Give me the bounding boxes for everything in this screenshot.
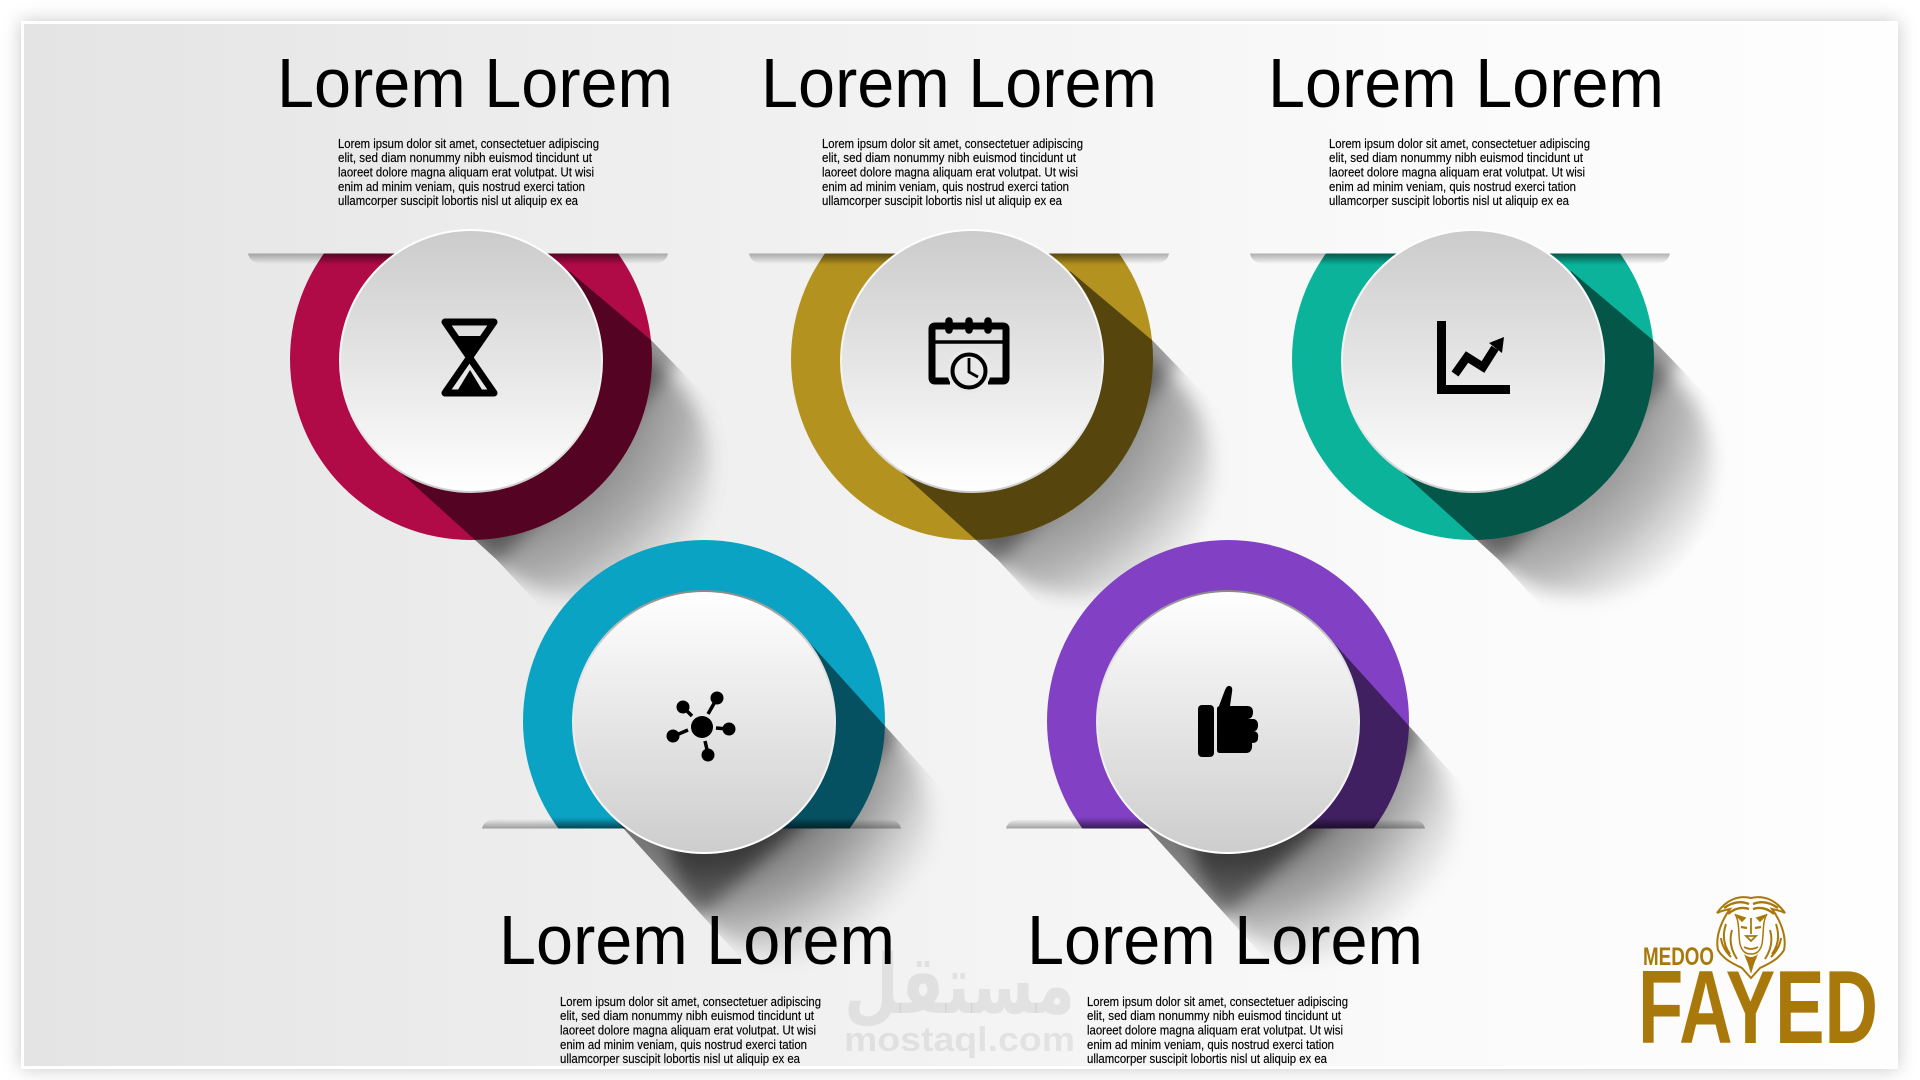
text block: ullamcorper suscipit lobortis nisl ut aliquip ex ea [1329, 194, 1569, 208]
text block: Lorem ipsum dolor sit amet, consectetuer adipiscing [1329, 137, 1590, 151]
badge: blue ring [482, 540, 931, 959]
text block: laoreet dolore magna aliquam erat volutpat. Ut wisi [1329, 166, 1585, 180]
icon: calendar with clock [932, 321, 1006, 393]
heading: Lorem Lorem [1268, 44, 1664, 122]
text block: Lorem ipsum dolor sit amet, consectetuer adipiscing [560, 995, 821, 1009]
watermark: mostaql.com [844, 1021, 1075, 1059]
badge: teal ring [1250, 231, 1718, 603]
text block: laoreet dolore magna aliquam erat volutpat. Ut wisi [560, 1024, 816, 1038]
icon: line chart with arrow [1437, 321, 1510, 394]
text block: ullamcorper suscipit lobortis nisl ut aliquip ex ea [822, 194, 1062, 208]
text block: laoreet dolore magna aliquam erat volutpat. Ut wisi [1087, 1024, 1343, 1038]
icon: lion head [1717, 897, 1785, 978]
badge: gold ring [749, 229, 1218, 603]
text block: elit, sed diam nonummy nibh euismod tincidunt ut [338, 151, 592, 165]
text block: enim ad minim veniam, quis nostrud exerci tation [1329, 180, 1576, 194]
text block: elit, sed diam nonummy nibh euismod tincidunt ut [1087, 1009, 1341, 1023]
text block: laoreet dolore magna aliquam erat volutpat. Ut wisi [822, 166, 1078, 180]
text block: enim ad minim veniam, quis nostrud exerci tation [338, 180, 585, 194]
text block [1087, 995, 1348, 1066]
panel: network [482, 540, 931, 1066]
text block: Lorem ipsum dolor sit amet, consectetuer adipiscing [338, 137, 599, 151]
text block: Lorem ipsum dolor sit amet, consectetuer adipiscing [822, 137, 1083, 151]
badge: crimson ring [248, 229, 716, 602]
icon: thumbs up [1198, 686, 1258, 757]
text block [822, 137, 1083, 208]
panel: calendar [749, 59, 1218, 603]
heading: Lorem Lorem [1027, 901, 1423, 979]
text block: elit, sed diam nonummy nibh euismod tincidunt ut [1329, 151, 1583, 165]
logo: Medoo Fayed [1638, 897, 1878, 1066]
icon: hourglass [445, 322, 494, 393]
wordmark: MEDOO: MEDOO [1643, 943, 1714, 971]
text block: Lorem ipsum dolor sit amet, consectetuer adipiscing [1087, 995, 1348, 1009]
text block [560, 995, 821, 1066]
heading: Lorem Lorem [277, 44, 673, 122]
heading: Lorem Lorem [761, 44, 1157, 122]
text block [338, 137, 599, 208]
text block: enim ad minim veniam, quis nostrud exerci tation [1087, 1038, 1334, 1052]
text block: enim ad minim veniam, quis nostrud exerci tation [822, 180, 1069, 194]
text block [1329, 137, 1590, 208]
panel: hourglass [248, 59, 716, 602]
text block: ullamcorper suscipit lobortis nisl ut aliquip ex ea [1087, 1052, 1327, 1066]
badge: purple ring [1006, 540, 1455, 959]
panel: growth chart [1250, 59, 1718, 603]
watermark: مستقل [844, 938, 1075, 1033]
panel: thumbs up [1006, 540, 1455, 1066]
text block: elit, sed diam nonummy nibh euismod tincidunt ut [822, 151, 1076, 165]
watermark [844, 938, 1075, 1059]
text block: laoreet dolore magna aliquam erat volutpat. Ut wisi [338, 166, 594, 180]
infographic canvas [248, 59, 1875, 1066]
text block: enim ad minim veniam, quis nostrud exerci tation [560, 1038, 807, 1052]
icon: network nodes [666, 692, 736, 762]
text block: ullamcorper suscipit lobortis nisl ut aliquip ex ea [338, 194, 578, 208]
text block: elit, sed diam nonummy nibh euismod tincidunt ut [560, 1009, 814, 1023]
heading: Lorem Lorem [499, 901, 895, 979]
text block: ullamcorper suscipit lobortis nisl ut aliquip ex ea [560, 1052, 800, 1066]
